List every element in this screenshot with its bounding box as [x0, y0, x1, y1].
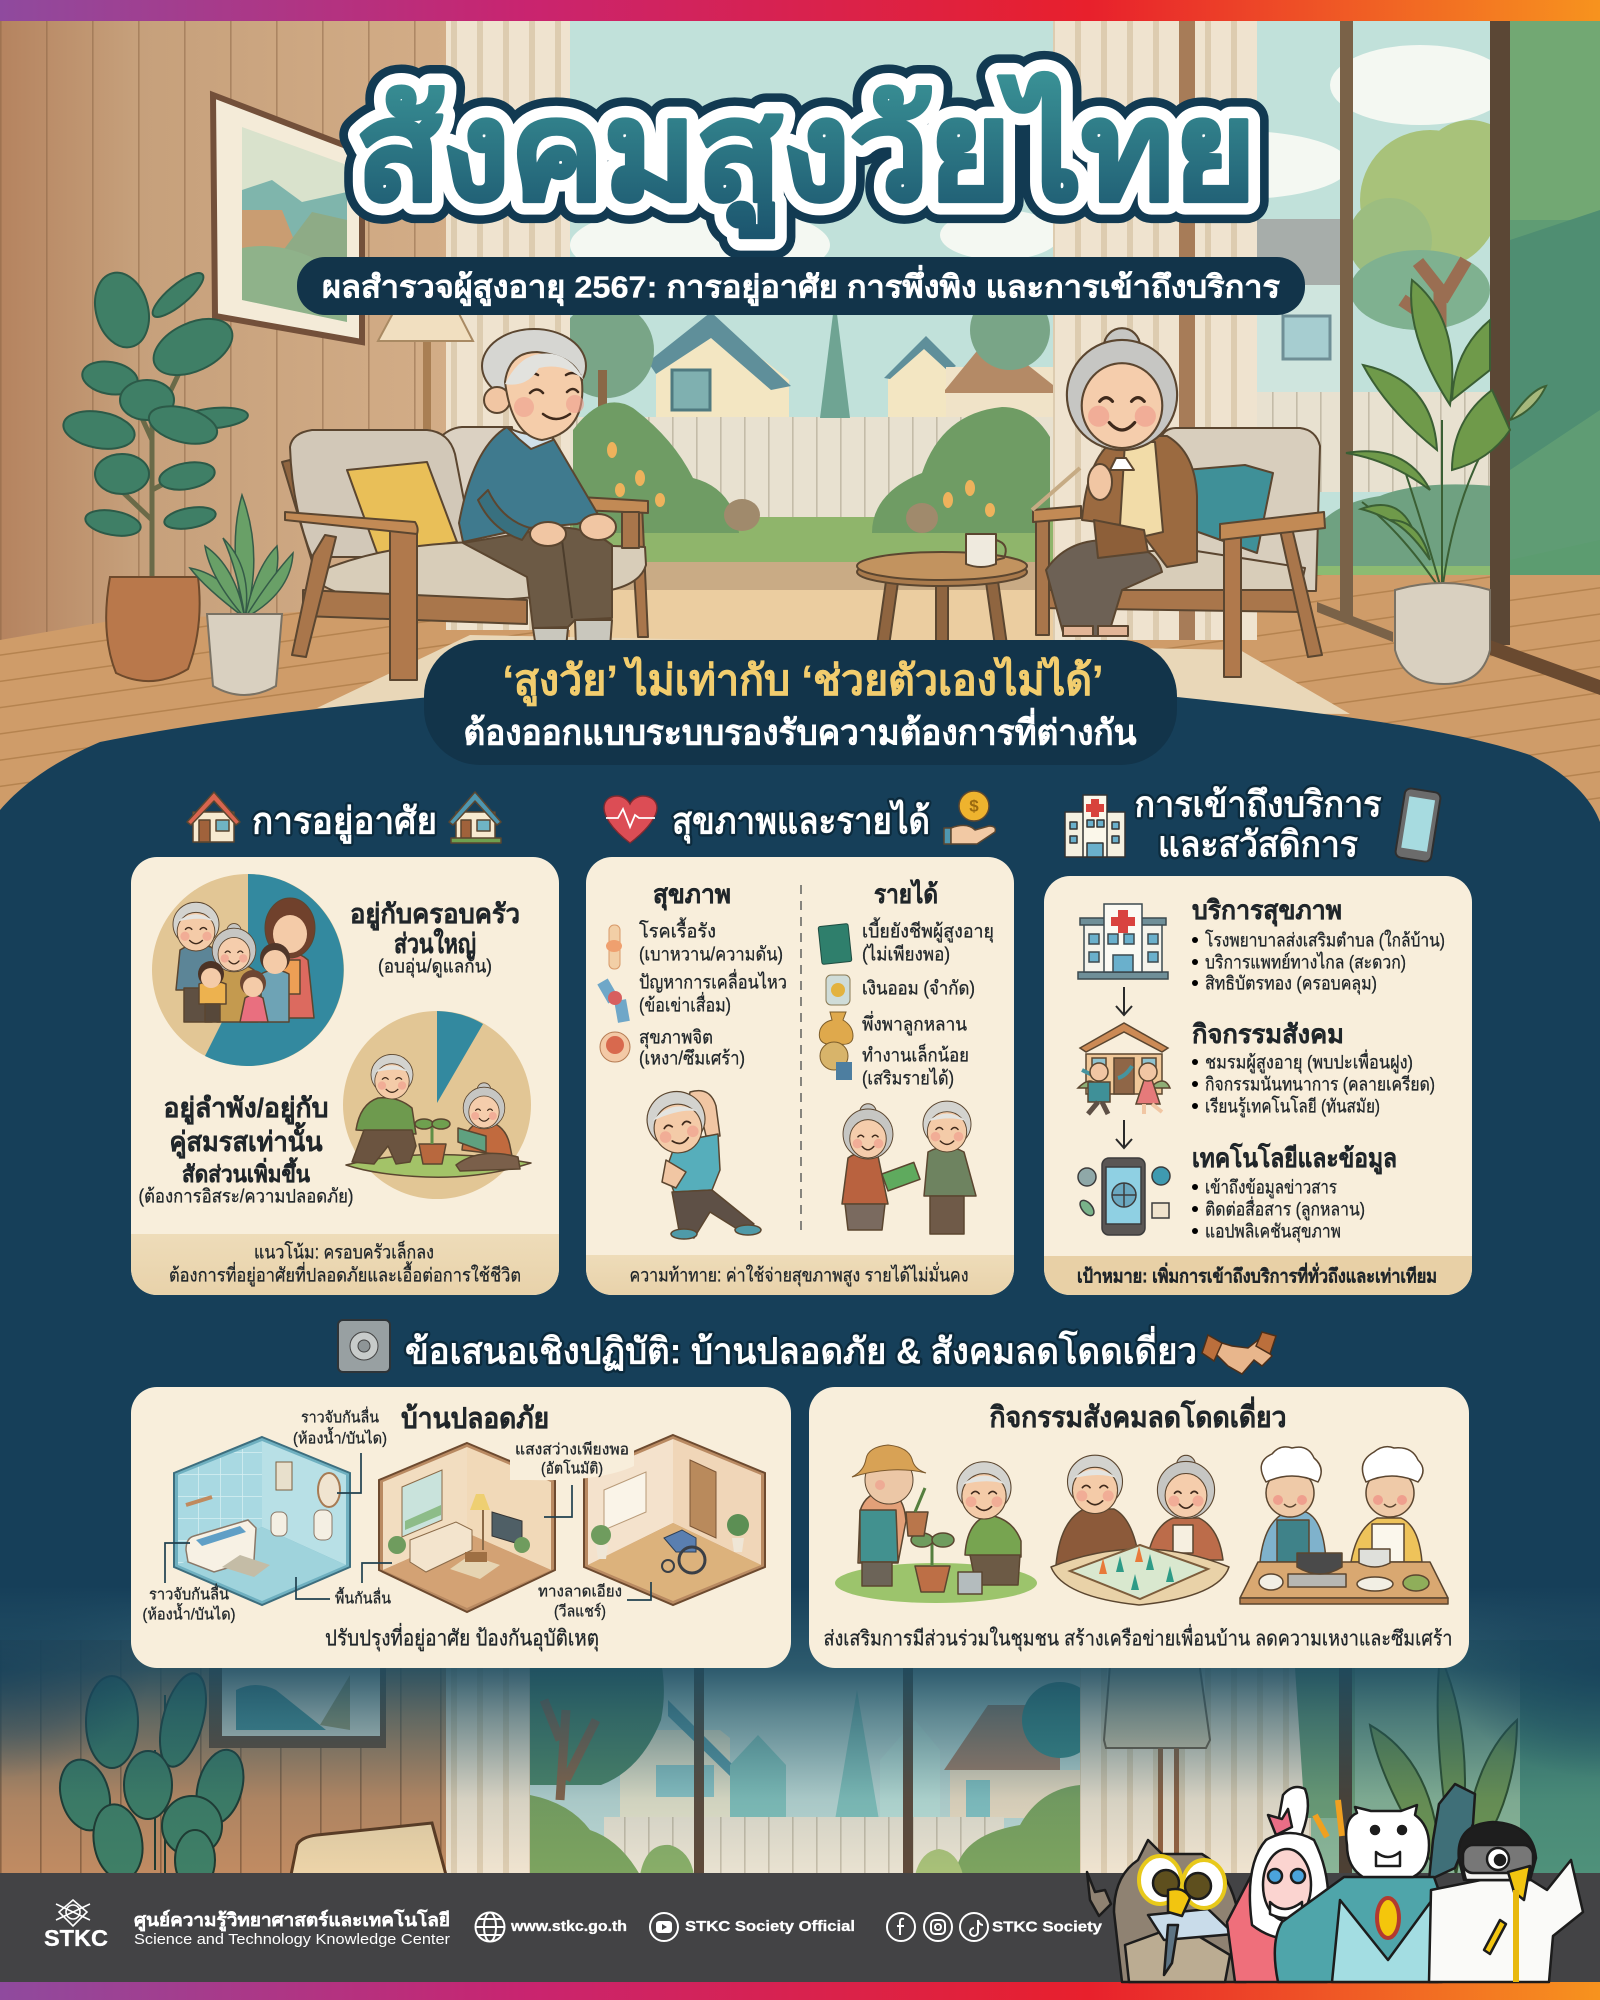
- heading: health and income: [604, 791, 995, 844]
- column: health: สุขภาพ: [653, 879, 731, 911]
- column: income: (เสริมรายได้): [862, 1068, 954, 1090]
- callout labels: ราวจับกันลื่น: [301, 1406, 379, 1426]
- mascot: penguin scientist: [1429, 1822, 1583, 1982]
- column: income: เงินออม (จำกัด): [862, 978, 975, 1000]
- heading: housing: การอยู่อาศัย: [252, 800, 437, 844]
- right plant: [1346, 280, 1546, 684]
- callout: goal: เป้าหมาย: เพิ่มการเข้าถึงบริการที่ทั่วถึงและเท่าเทียม: [1077, 1262, 1437, 1288]
- icon: hand and coin: $: [969, 796, 979, 816]
- garden: fence grass houses bushes: [558, 290, 1055, 567]
- callout: income challenge: ความท้าทาย: ค่าใช้จ่ายสุขภาพสูง รายได้ไม่มั่นคง: [630, 1262, 968, 1288]
- column: income: เบี้ยยังชีพผู้สูงอายุ: [862, 918, 994, 944]
- subtitle pill: [297, 257, 1305, 315]
- outside right garden: [1257, 20, 1600, 680]
- footer organisation name: ศูนย์ความรู้วิทยาศาสตร์และเทคโนโลยี: [134, 1909, 450, 1932]
- lower room backdrop: [0, 1640, 1600, 1890]
- callout: housing trend: [169, 1240, 521, 1286]
- subtitle pill: ผลสำรวจผู้สูงอายุ 2567: การอยู่อาศัย การพึ่งพิง และการเข้าถึงบริการ: [322, 264, 1280, 306]
- mascot: pink rabbit: [1227, 1787, 1342, 1982]
- footer website: www.stkc.go.th: [510, 1919, 627, 1935]
- text: technology: [1192, 1142, 1397, 1244]
- heading: services and welfare: การเข้าถึงบริการ: [1134, 784, 1382, 824]
- label: living alone: สัดส่วนเพิ่มขึ้น: [182, 1157, 310, 1187]
- footer band: [0, 1873, 1600, 1982]
- icon: savings jar: [826, 975, 850, 1005]
- icon: hospital: [1078, 904, 1168, 979]
- icon: passbook: [818, 924, 852, 964]
- text: technology: แอปพลิเคชันสุขภาพ: [1205, 1220, 1341, 1244]
- mascot: owl: [1087, 1840, 1246, 1982]
- callout labels: พื้นกันลื่น: [335, 1586, 391, 1608]
- icon: safe: [338, 1320, 390, 1372]
- text: social activities: ชมรมผู้สูงอายุ (พบปะเพื่อนฝูง): [1205, 1050, 1413, 1074]
- footer organisation name: Science and Technology Knowledge Center: [134, 1932, 450, 1948]
- pie: living alone: [343, 1011, 531, 1199]
- column: income: ทำงานเล็กน้อย: [862, 1042, 969, 1066]
- illustration: board game: [1051, 1509, 1229, 1605]
- faces of money couple: [843, 1101, 971, 1159]
- text: technology: เข้าถึงข้อมูลข่าวสาร: [1205, 1176, 1337, 1198]
- heading: practical proposals: ข้อเสนอเชิงปฏิบัติ: บ้านปลอดภัย & สังคมลดโดดเดี่ยว: [405, 1326, 1197, 1372]
- footer logo: STKC: [44, 1925, 108, 1951]
- callout labels: (ห้องน้ำ/บันได): [293, 1426, 387, 1448]
- column: health: ปัญหาการเคลื่อนไหว: [639, 968, 787, 994]
- column: income: [818, 878, 994, 1234]
- icon: knee: [606, 925, 622, 969]
- label: living alone: [138, 1093, 354, 1208]
- callout labels: ราวจับกันลื่น: [149, 1584, 229, 1604]
- icon: red house: [187, 792, 240, 842]
- heading: housing: [187, 792, 501, 844]
- mascots: [1087, 1784, 1583, 1982]
- illustration: bathroom room: [174, 1437, 350, 1605]
- text: technology: ติดต่อสื่อสาร (ลูกหลาน): [1205, 1196, 1365, 1220]
- callout: housing trend: ต้องการที่อยู่อาศัยที่ปลอดภัยและเอื้อต่อการใช้ชีวิต: [169, 1262, 521, 1286]
- label: living with family: อยู่กับครอบครัว: [350, 899, 520, 931]
- pie: living with family: [152, 874, 344, 1066]
- icon: brain head: [600, 1032, 630, 1062]
- text: social activities: กิจกรรมสังคม: [1192, 1019, 1344, 1049]
- illustration: wheelchair room: [584, 1435, 765, 1605]
- board game heads: [1068, 1455, 1215, 1519]
- callout labels: (ห้องน้ำ/บันได): [142, 1602, 236, 1624]
- faces of couple: [371, 1054, 505, 1129]
- footer social: STKC Society: [992, 1918, 1103, 1936]
- key message pill: ต้องออกแบบระบบรองรับความต้องการที่ต่างกัน: [464, 708, 1137, 752]
- callout labels: (อัตโนมัติ): [541, 1460, 603, 1478]
- column: health: สุขภาพจิต: [639, 1028, 713, 1050]
- icon: blue house: [449, 792, 501, 843]
- callout labels: [142, 1406, 634, 1624]
- coffee table and cup: [857, 534, 1027, 645]
- text: health services: บริการสุขภาพ: [1192, 895, 1342, 927]
- footer youtube: STKC Society Official: [685, 1919, 855, 1935]
- top gradient bar: [0, 0, 1600, 21]
- fiddle leaf plant left: [60, 267, 249, 681]
- panel: safe home: บ้านปลอดภัย: [401, 1403, 549, 1435]
- illustration: living room: [379, 1443, 555, 1612]
- column: health: (เหงา/ซึมเศร้า): [639, 1048, 745, 1070]
- title: สังคมสูงวัยไทย: [356, 73, 1256, 238]
- curtains and window frames: [446, 20, 1600, 695]
- panel: housing: [131, 857, 559, 1295]
- label: living with family: [350, 899, 520, 978]
- mascot: polar bear robot: [1275, 1784, 1475, 1982]
- caption: ส่งเสริมการมีส่วนร่วมในชุมชน สร้างเครือข่ายเพื่อนบ้าน ลดความเหงาและซึมเศร้า: [824, 1624, 1452, 1652]
- text: technology: เทคโนโลยีและข้อมูล: [1192, 1142, 1397, 1175]
- sky clouds: [570, 45, 1510, 285]
- heading: services and welfare: [1065, 784, 1441, 864]
- callout labels: แสงสว่างเพียงพอ: [515, 1442, 629, 1458]
- icon: handshake: [1202, 1332, 1276, 1374]
- callout lines: [165, 1453, 651, 1600]
- faces of family: [173, 898, 315, 997]
- callout labels: ทางลาดเอียง: [538, 1584, 622, 1600]
- panel: social activities: กิจกรรมสังคมลดโดดเดี่ยว: [990, 1396, 1286, 1434]
- elderly woman: [1032, 436, 1197, 636]
- footer website: [476, 1912, 627, 1942]
- label: living alone: คู่สมรสเท่านั้น: [170, 1121, 323, 1159]
- lower wall picture: [209, 1640, 386, 1748]
- icon: community center: [1078, 1023, 1170, 1114]
- floor lamp: [378, 300, 473, 430]
- left armchair: [282, 427, 648, 680]
- callout labels: (วีลแชร์): [554, 1602, 606, 1620]
- illustration: family group: [176, 944, 314, 1022]
- arrow: [1116, 1120, 1132, 1148]
- label: living alone: (ต้องการอิสระ/ความปลอดภัย): [138, 1186, 354, 1208]
- text: social activities: กิจกรรมนันทนาการ (คลายเครียด): [1205, 1074, 1435, 1094]
- column: health: [597, 879, 787, 1239]
- column: health: โรคเรื้อรัง: [639, 918, 716, 942]
- icon: heart: [604, 796, 657, 843]
- panel: services: [1044, 876, 1472, 1295]
- gardening man head: [957, 1462, 1011, 1519]
- text: social activities: [1192, 1019, 1435, 1118]
- illustration: gardening: [835, 1445, 1037, 1603]
- text: health services: โรงพยาบาลส่งเสริมตำบล (ใกล้บ้าน): [1205, 930, 1445, 950]
- footer organisation name: [134, 1909, 450, 1948]
- icon: joint: [597, 978, 630, 1023]
- text: health services: [1192, 895, 1445, 996]
- panel: safe home: [131, 1387, 791, 1668]
- footer social: [887, 1913, 1103, 1941]
- man head: [482, 329, 586, 440]
- title: สังคมสูงวัยไทย: [356, 73, 1256, 238]
- elderly man: [459, 427, 616, 648]
- icon: hospital small: [1065, 795, 1125, 857]
- illustration: couple exchanging money: [842, 1147, 976, 1234]
- left wood wall: [0, 20, 450, 640]
- key message pill: [424, 640, 1177, 765]
- exercising elder head: [642, 1086, 711, 1158]
- key message pill: ‘สูงวัย’ ไม่เท่ากับ ‘ช่วยตัวเองไม่ได้’: [502, 656, 1104, 706]
- small plant white pot: [190, 495, 293, 695]
- column: health: (ข้อเข่าเสื่อม): [639, 992, 731, 1016]
- wall picture: [213, 95, 362, 342]
- label: living with family: ส่วนใหญ่: [394, 928, 476, 960]
- panel: social activities: [809, 1387, 1469, 1668]
- column: income: พึ่งพาลูกหลาน: [862, 1010, 967, 1036]
- text: health services: สิทธิบัตรทอง (ครอบคลุม): [1205, 972, 1377, 996]
- navy content panel: [0, 697, 1600, 1870]
- illustration: cooking: [1240, 1447, 1448, 1604]
- caption: ปรับปรุงที่อยู่อาศัย ป้องกันอุบัติเหตุ: [325, 1622, 599, 1652]
- dark side vignettes: [0, 1558, 1600, 1778]
- label: living with family: (อบอุ่น/ดูแลกัน): [378, 956, 492, 978]
- footer logo: [44, 1900, 108, 1951]
- floor: [0, 562, 1600, 875]
- heading: services and welfare: และสวัสดิการ: [1158, 824, 1359, 864]
- panel: health and income: [586, 857, 1014, 1295]
- text: health services: บริการแพทย์ทางไกล (สะดวก): [1205, 952, 1406, 972]
- arrow: [1116, 987, 1132, 1015]
- column: income: รายได้: [874, 878, 938, 909]
- title: สังคมสูงวัยไทย: [356, 73, 1256, 238]
- woman head: [1067, 328, 1177, 450]
- icon: smartphone and apps: [1077, 1158, 1170, 1235]
- text: social activities: เรียนรู้เทคโนโลยี (ทันสมัย): [1205, 1096, 1380, 1118]
- icon: tablet: [1395, 788, 1441, 862]
- icon: work globe: [820, 1042, 852, 1080]
- heading: practical proposals: [338, 1320, 1276, 1374]
- column: health: (เบาหวาน/ความดัน): [639, 944, 783, 966]
- column: income: (ไม่เพียงพอ): [862, 944, 950, 966]
- callout: housing trend: แนวโน้ม: ครอบครัวเล็กลง: [254, 1240, 434, 1264]
- right armchair: [1033, 428, 1325, 677]
- illustration: exercising elder: [662, 1091, 761, 1239]
- icon: money bag: [819, 1012, 853, 1044]
- illustration: couple gardening: [346, 1098, 531, 1177]
- bottom gradient bar: [0, 1982, 1600, 2000]
- label: living alone: อยู่ลำพัง/อยู่กับ: [164, 1093, 328, 1125]
- heading: health and income: สุขภาพและรายได้: [672, 798, 930, 844]
- icon: hand and coin: [944, 791, 995, 844]
- footer youtube: [650, 1913, 855, 1941]
